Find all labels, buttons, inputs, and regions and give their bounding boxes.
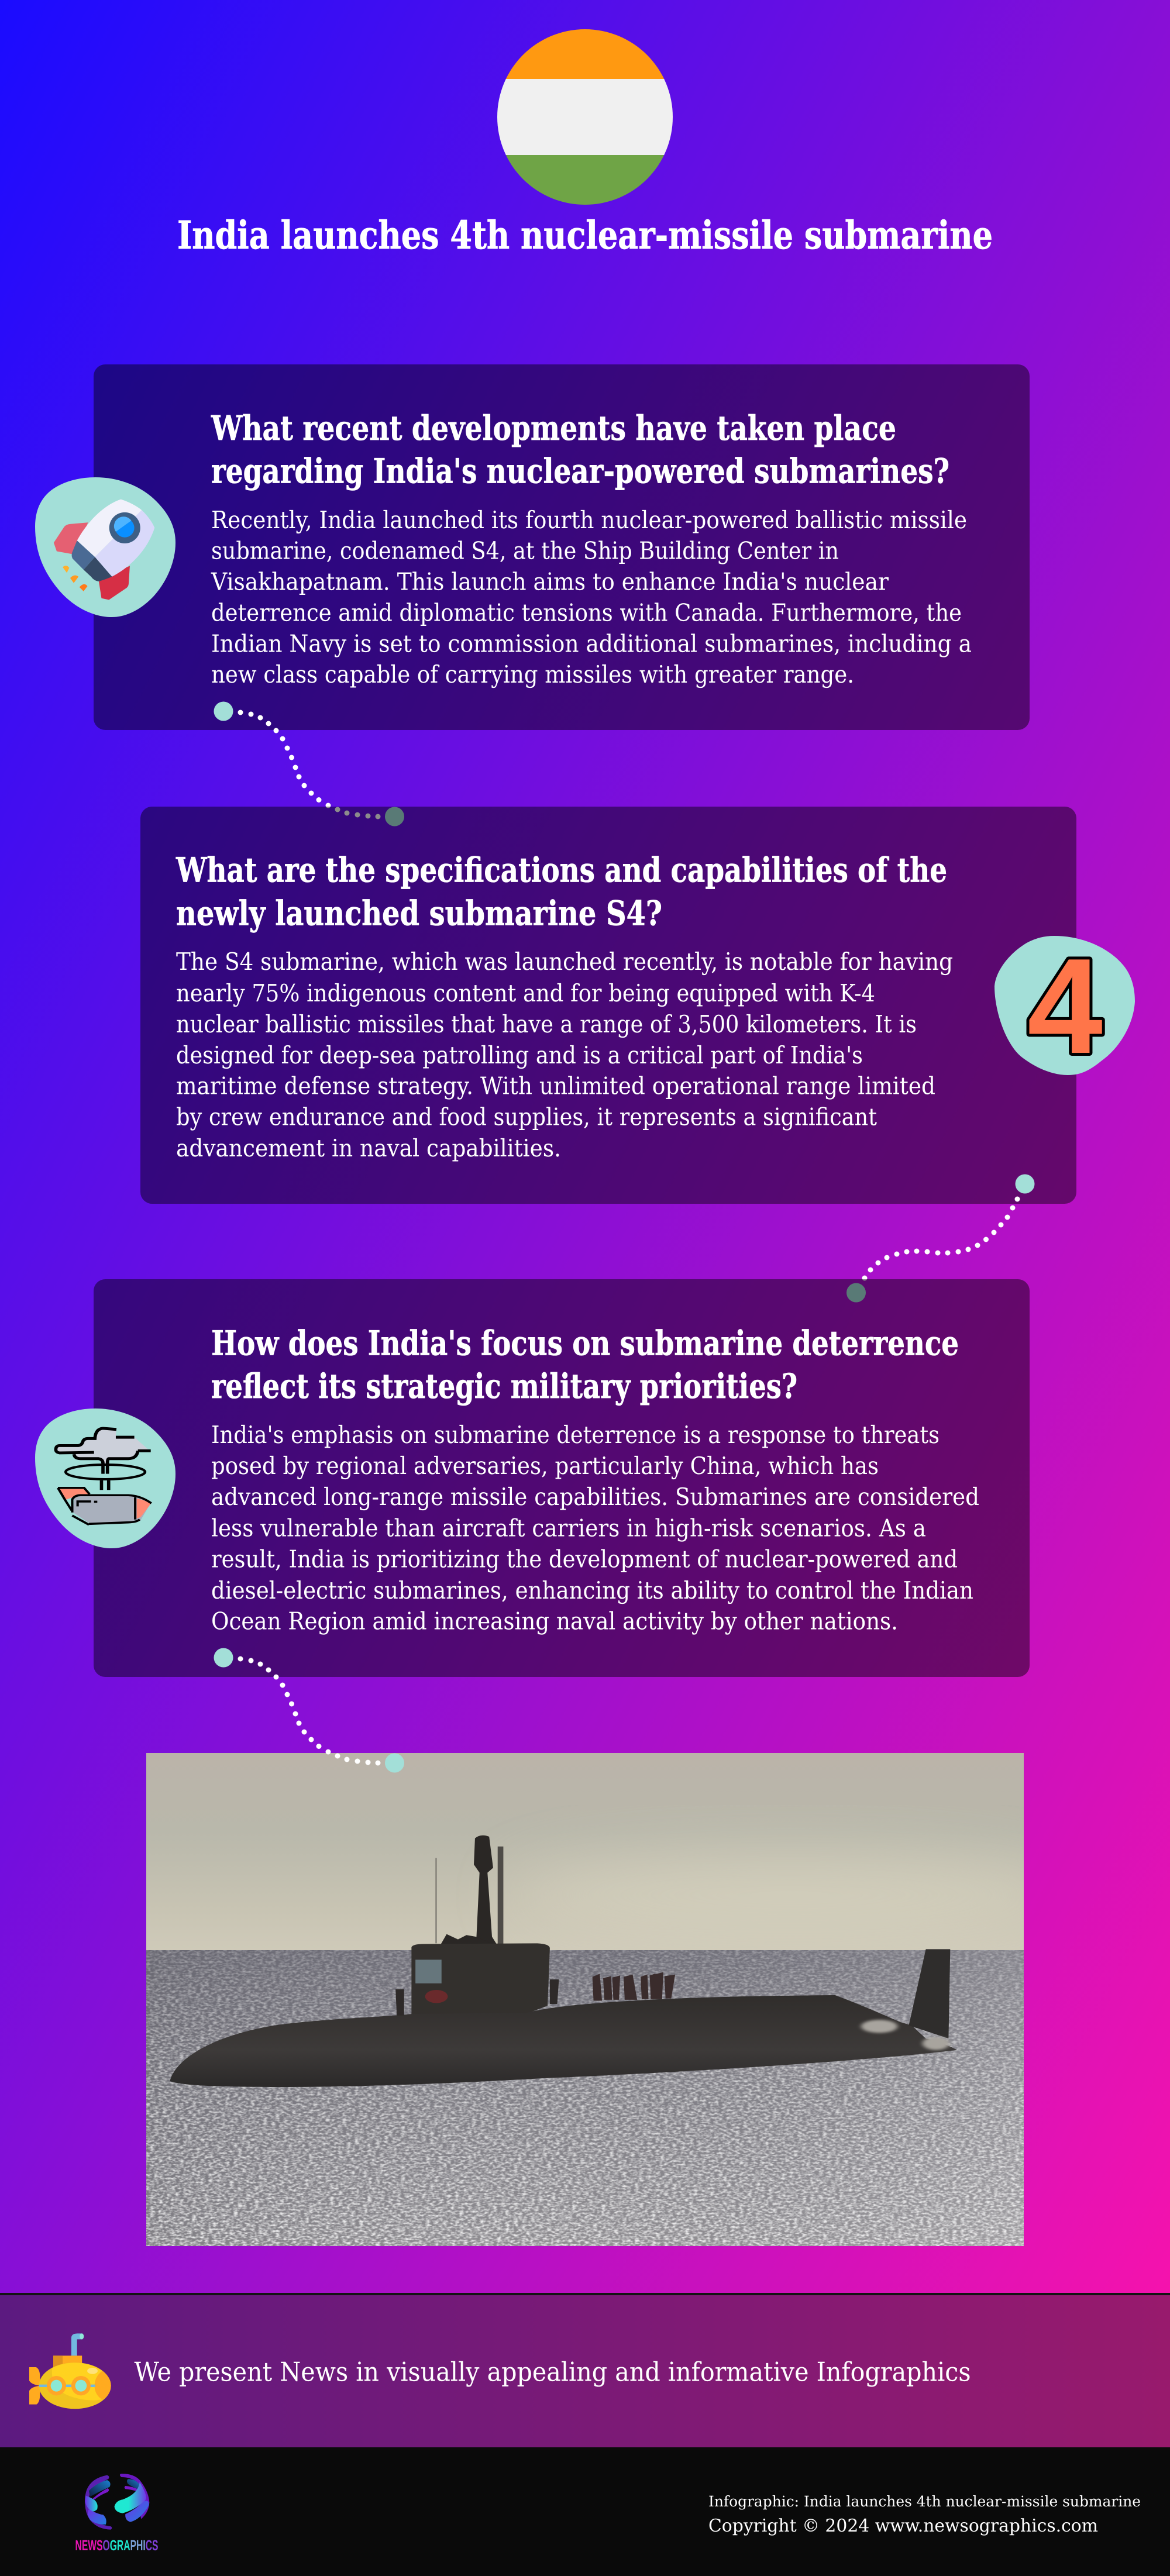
footer divider line xyxy=(0,2293,1170,2295)
logo: Newsographics xyxy=(75,2474,158,2554)
submarine xyxy=(170,1835,957,2087)
body text: posed by regional adversaries, particularly China, which has xyxy=(211,1452,879,1480)
body text: Visakhapatnam. This launch aims to enhance India's nuclear xyxy=(211,567,889,595)
body text: Ocean Region amid increasing naval activity by other nations. xyxy=(211,1607,898,1635)
credit line: Infographic: India launches 4th nuclear-missile submarine xyxy=(708,2493,1141,2510)
panel background xyxy=(94,1279,1030,1677)
panel: recent developments xyxy=(35,364,1030,730)
sea xyxy=(146,1950,1024,2246)
body text: advancement in naval capabilities. xyxy=(176,1134,561,1162)
logo wordmark: NEWSOGRAPHICS xyxy=(75,2537,158,2554)
body text: less vulnerable than aircraft carriers in high-risk scenarios. As a xyxy=(211,1514,926,1542)
heading xyxy=(176,850,947,934)
body text: The S4 submarine, which was launched recently, is notable for having xyxy=(176,948,953,976)
icon: number four on teal blob: 4 xyxy=(1027,931,1103,1082)
panel: specifications of S4 xyxy=(140,807,1135,1204)
photo: submarine at sea xyxy=(146,1753,1071,2246)
band background xyxy=(0,2295,1170,2447)
panel background xyxy=(140,807,1076,1204)
panel background xyxy=(94,364,1030,730)
heading xyxy=(211,408,949,491)
body text: Indian Navy is set to commission additional submarines, including a xyxy=(211,629,972,657)
body text: by crew endurance and food supplies, it represents a significant xyxy=(176,1103,877,1131)
sea sparkle texture xyxy=(146,1950,1024,2246)
body text: India's emphasis on submarine deterrence is a response to threats xyxy=(211,1421,940,1449)
body text: submarine, codenamed S4, at the Ship Building Center in xyxy=(211,537,839,565)
icon: number four on teal blob xyxy=(994,931,1135,1082)
copyright line: Copyright © 2024 www.newsographics.com xyxy=(708,2516,1098,2536)
heading: newly launched submarine S4? xyxy=(176,894,662,934)
title: India launches 4th nuclear-missile submarine xyxy=(177,212,993,258)
sky glow xyxy=(574,1853,1006,1913)
body text xyxy=(211,506,972,688)
sea side shading xyxy=(146,1950,1024,2246)
connector: dotted path from panel 2 to panel 3 xyxy=(846,1175,1034,1302)
icon: rocket on teal blob xyxy=(35,477,176,617)
tagline text: We present News in visually appealing and informative Infographics xyxy=(135,2356,971,2388)
body text: advanced long-range missile capabilities. Submarines are considered xyxy=(211,1483,979,1511)
icon: India flag circle xyxy=(497,29,673,205)
body text: new class capable of carrying missiles with greater range. xyxy=(211,660,854,688)
sky xyxy=(146,1753,1024,1950)
body text: nearly 75% indigenous content and for being equipped with K-4 xyxy=(176,979,875,1007)
body text: result, India is prioritizing the development of nuclear-powered and xyxy=(211,1545,958,1573)
body text xyxy=(211,1421,979,1635)
body text: deterrence amid diplomatic tensions with Canada. Furthermore, the xyxy=(211,599,962,627)
panel: strategic priorities xyxy=(35,1279,1030,1677)
heading: reflect its strategic military priorities? xyxy=(211,1366,797,1406)
heading: regarding India's nuclear-powered submarines? xyxy=(211,452,949,491)
icon: yellow submarine xyxy=(29,2333,111,2409)
heading: What recent developments have taken place xyxy=(211,408,896,448)
body text: Recently, India launched its fourth nuclear-powered ballistic missile xyxy=(211,506,967,534)
icon: nuclear missile on teal blob xyxy=(35,1408,176,1548)
heading: What are the specifications and capabilities of the xyxy=(176,850,947,890)
connector: dotted path from panel 3 to photo xyxy=(214,1648,404,1772)
heading: How does India's focus on submarine deterrence xyxy=(211,1323,959,1363)
body text xyxy=(176,948,953,1162)
tagline band xyxy=(0,2295,1170,2447)
body text: diesel-electric submarines, enhancing its ability to control the Indian xyxy=(211,1576,973,1604)
connector: dotted path from panel 1 to panel 2 xyxy=(214,702,404,826)
footer black bar xyxy=(0,2447,1170,2576)
body text: designed for deep-sea patrolling and is a critical part of India's xyxy=(176,1041,863,1069)
heading xyxy=(211,1323,959,1406)
body text: maritime defense strategy. With unlimited operational range limited xyxy=(176,1072,935,1100)
body text: nuclear ballistic missiles that have a range of 3,500 kilometers. It is xyxy=(176,1010,917,1038)
